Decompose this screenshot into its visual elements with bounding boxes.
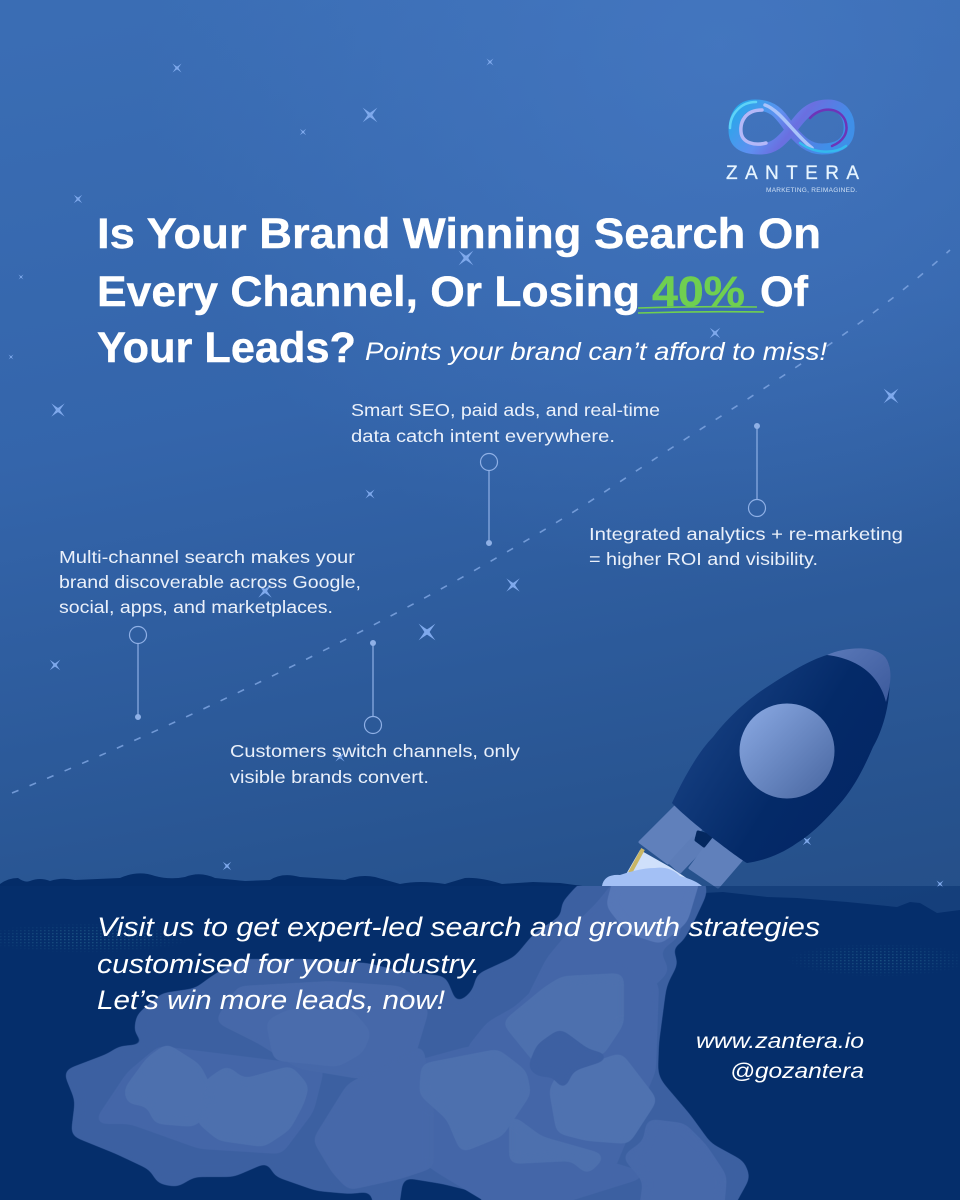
text: smart SEO xyxy=(351,400,660,446)
marker: point 2 xyxy=(364,641,382,734)
light patch H xyxy=(513,1120,600,1170)
title: Is Your Brand Winning Search On xyxy=(97,210,821,258)
contact details: www.zantera.io xyxy=(696,1030,864,1053)
dark fold xyxy=(532,1033,604,1085)
title: Of xyxy=(760,268,809,316)
ground xyxy=(0,873,960,1200)
call to action xyxy=(97,912,820,1015)
text: smart SEO: Smart SEO, paid ads, and real-time xyxy=(351,400,660,420)
hull xyxy=(672,650,890,863)
text: customers switch xyxy=(230,741,520,787)
call to action: Visit us to get expert-led search and growth strategies xyxy=(97,912,820,942)
lobe: upper middle xyxy=(530,888,680,992)
underline xyxy=(638,307,764,313)
dashed growth line xyxy=(12,250,950,793)
title: Your Leads? xyxy=(97,324,356,372)
lobe: centre top xyxy=(220,985,425,1075)
light patch I xyxy=(627,1123,723,1200)
highlighted figure: 40% xyxy=(652,268,745,316)
window xyxy=(740,704,834,798)
text: integrated analytics: Integrated analytics + re-marketing xyxy=(589,524,903,544)
light patch A xyxy=(128,1048,210,1123)
translucent band xyxy=(0,886,960,1200)
light patch B xyxy=(200,1070,305,1143)
wordmark: ZANTERA xyxy=(726,163,859,184)
lobe: lower right xyxy=(412,1050,640,1200)
call to action: customised for your industry. xyxy=(97,949,480,979)
text: multi-channel: social, apps, and marketplaces. xyxy=(59,597,333,617)
flame xyxy=(602,849,700,887)
title xyxy=(97,210,821,372)
text: multi-channel xyxy=(59,547,361,617)
exhaust puffs xyxy=(602,868,702,886)
text: integrated analytics: = higher ROI and visibility. xyxy=(589,549,818,569)
text: smart SEO: data catch intent everywhere. xyxy=(351,426,615,446)
text: customers switch: Customers switch channels, only xyxy=(230,741,520,761)
text: multi-channel: brand discoverable across Google, xyxy=(59,572,361,592)
icon: infinity xyxy=(730,102,849,152)
lobe: left cloud xyxy=(100,1050,320,1150)
marker: point 1 xyxy=(130,626,146,719)
marker: point 3 xyxy=(480,454,498,545)
title: Every Channel, Or Losing xyxy=(97,268,640,316)
contact details: @gozantera xyxy=(730,1060,864,1083)
exhaust smoke xyxy=(68,865,746,1200)
text: multi-channel: Multi-channel search makes your xyxy=(59,547,355,567)
halftone texture xyxy=(0,927,178,950)
nozzles xyxy=(640,807,743,887)
light patch C xyxy=(272,1052,286,1062)
text: customers switch: visible brands convert. xyxy=(230,767,429,787)
rocket xyxy=(602,648,890,887)
text: integrated analytics xyxy=(589,524,903,569)
logo: Zantera xyxy=(726,102,859,194)
light patch G xyxy=(507,977,620,1060)
lobe: column xyxy=(470,985,658,1162)
stars xyxy=(9,58,944,888)
marker: point 4 xyxy=(748,424,766,516)
tagline: MARKETING, REIMAGINED. xyxy=(766,187,857,194)
silhouette xyxy=(68,865,746,1200)
lobe: lower centre xyxy=(317,1050,430,1186)
call to action: Let’s win more leads, now! xyxy=(97,985,446,1015)
subtitle: Points your brand can’t afford to miss! xyxy=(365,338,827,366)
light patch F xyxy=(553,1057,653,1140)
smoke near flame xyxy=(610,876,696,940)
light patch E xyxy=(423,1053,527,1148)
contact details xyxy=(696,1030,864,1083)
nose cone xyxy=(827,648,890,702)
